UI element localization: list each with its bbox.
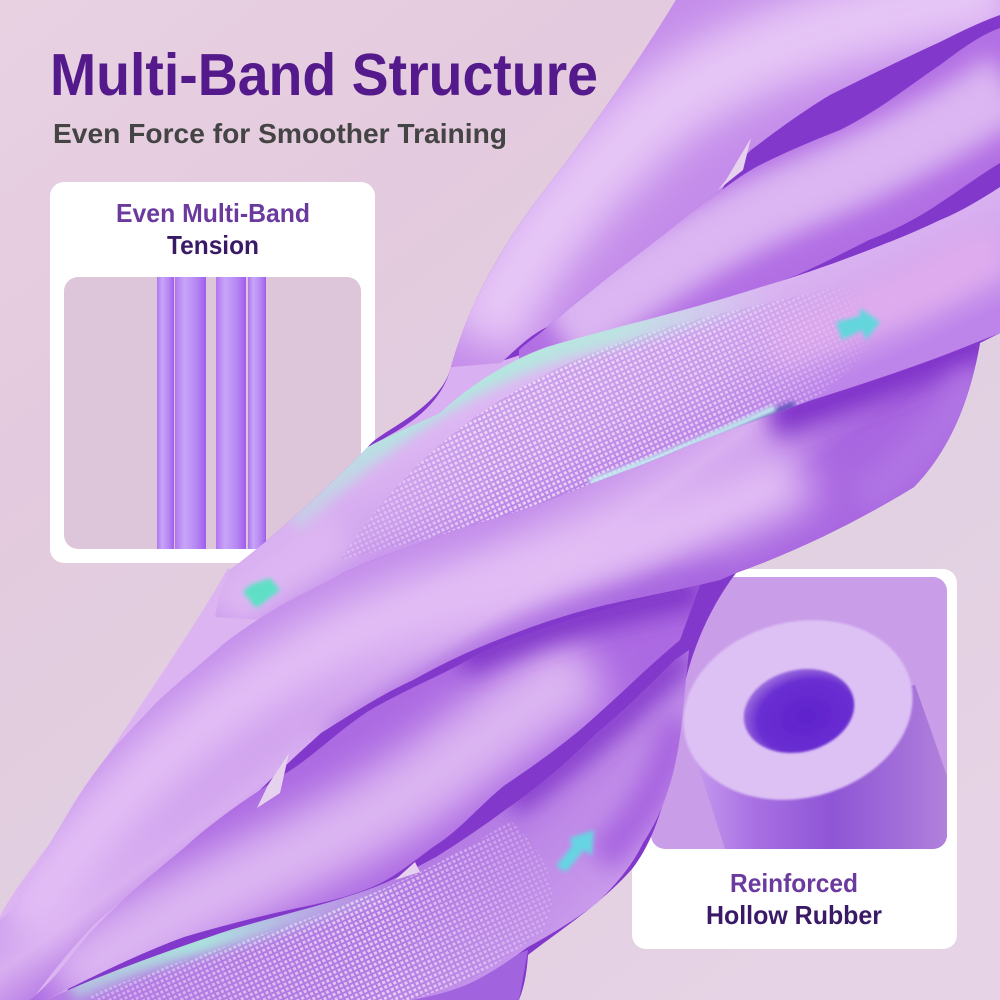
teal glow lower	[70, 880, 400, 990]
panel heading	[116, 198, 310, 260]
icon: teal arrow left	[243, 578, 280, 608]
panel heading: Even Multi-Band	[116, 198, 310, 228]
strand: lower mesh	[46, 650, 689, 1000]
teal glow upper	[290, 288, 780, 520]
mesh texture upper	[340, 292, 856, 560]
underside patch behind mesh strand	[368, 345, 550, 447]
panel heading: Reinforced	[730, 868, 858, 898]
strand: lower big	[0, 343, 980, 1000]
title: Multi-Band Structure	[50, 42, 598, 108]
icon: teal arrow upper right	[836, 308, 880, 340]
mesh texture lower	[90, 820, 552, 1000]
panel: reinforced hollow rubber	[632, 569, 957, 949]
slit: upper gap	[718, 138, 751, 190]
panel heading: Tension	[167, 230, 259, 260]
icon: teal arrow lower	[556, 830, 594, 872]
strand: upper middle	[519, 28, 1000, 358]
slit: lower gap	[257, 753, 289, 808]
strand: back top	[451, 0, 1000, 367]
lower shine upper	[590, 405, 795, 490]
strand: outer left	[0, 568, 300, 1000]
strand: bottom underside	[400, 950, 528, 1000]
inner image: parallel bands	[64, 277, 361, 549]
inner image: hollow tube	[651, 577, 947, 849]
panel: even multi-band tension	[50, 182, 375, 563]
small lower notch	[395, 862, 420, 880]
subtitle: Even Force for Smoother Training	[53, 118, 507, 149]
panel heading	[706, 868, 882, 930]
strand: lower middle	[30, 585, 700, 1000]
strand: mesh upper	[215, 187, 1000, 620]
panel heading: Hollow Rubber	[706, 900, 882, 930]
